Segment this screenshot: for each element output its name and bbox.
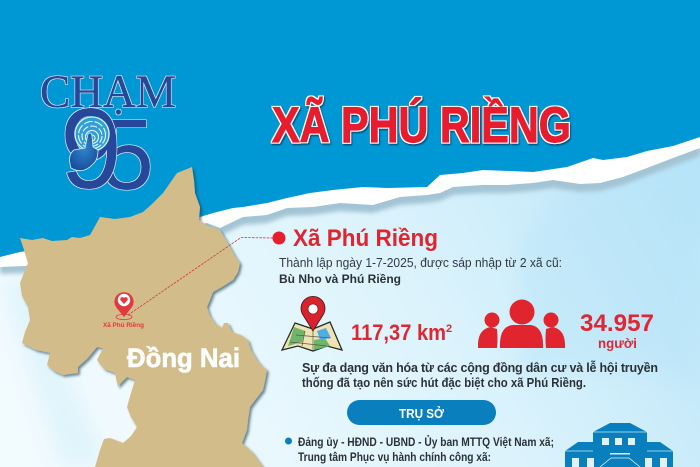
headquarters list — [285, 434, 554, 464]
pill heading: Trụ sở: TRỤ SỞ — [399, 406, 445, 421]
founding text: Thành lập ngày 1-7-2025, được sáp nhập từ 2 xã cũ: — [279, 256, 562, 270]
fingerprint — [74, 116, 110, 152]
description: thống đã tạo nên sức hút đặc biệt cho xã Phú Riềng. — [302, 376, 586, 390]
stat: population: người — [598, 335, 637, 351]
light wave accents — [0, 150, 700, 467]
icon: map with pin — [282, 296, 342, 351]
hand — [70, 133, 98, 171]
pin label: Xã Phú Riềng — [103, 320, 144, 329]
founding text: Bù Nho và Phú Riềng — [279, 272, 401, 286]
dashed connector — [128, 238, 274, 315]
logo: Chạm 95 — [40, 66, 176, 213]
logo word: CHẠM — [40, 66, 176, 118]
icon: people — [478, 300, 565, 348]
headquarters list: Đảng ủy - HĐND - UBND - Ủy ban MTTQ Việt Nam xã; — [298, 434, 554, 449]
description: Sự đa dạng văn hóa từ các cộng đồng dân cư và lễ hội truyền — [302, 360, 658, 375]
logo numeral 9: 9 — [60, 86, 122, 213]
headquarters list: Trung tâm Phục vụ hành chính công xã: — [298, 450, 491, 464]
stat: population: 34.957 — [580, 310, 654, 337]
stat: area: 117,37 km — [351, 320, 446, 345]
stat: population — [580, 310, 654, 351]
blue header band — [0, 0, 700, 257]
map: Đồng Nai — [20, 167, 267, 467]
torn paper shadow — [0, 0, 700, 274]
founding text — [279, 256, 562, 286]
icon: building — [565, 423, 673, 467]
logo numeral 5: 5 — [101, 99, 154, 211]
pill heading: Trụ sở — [347, 400, 496, 425]
map label: Đồng Nai: Đồng Nai — [127, 343, 240, 373]
section heading: Xã Phú Riềng — [293, 225, 438, 252]
stat: area: 2 — [446, 323, 452, 335]
location pin — [114, 292, 134, 320]
torn paper white edge — [0, 0, 700, 267]
title: XÃ PHÚ RIỀNG — [272, 97, 571, 153]
description — [302, 360, 658, 390]
